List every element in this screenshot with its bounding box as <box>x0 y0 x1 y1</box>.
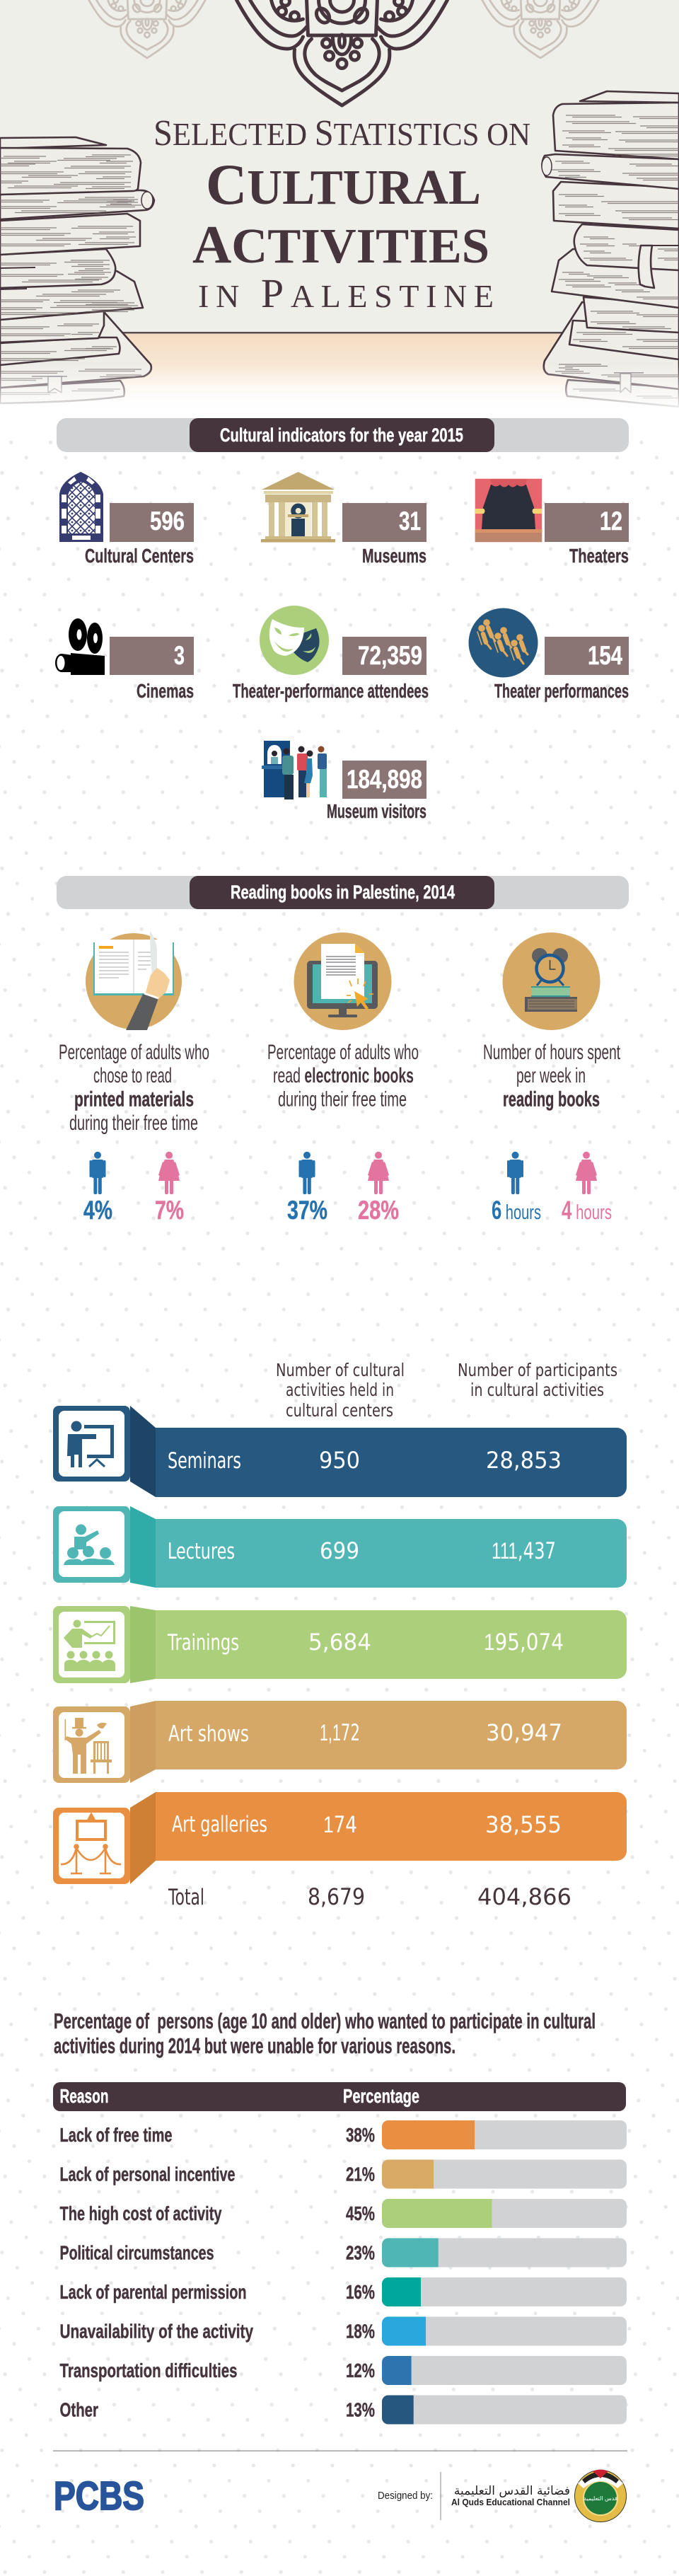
text: description: Percentage of adults who <box>59 1041 209 1064</box>
section heading: cultural indicators <box>57 418 629 452</box>
indicator: theater-performance attendees <box>233 606 429 702</box>
panel: indicators <box>55 472 629 822</box>
row: art shows: Art shows <box>168 1721 249 1747</box>
row: seminars: 28,853 <box>486 1447 562 1474</box>
row: seminars: Seminars <box>168 1448 241 1474</box>
indicator: theater performances <box>468 608 629 702</box>
male value: 6 hours <box>492 1196 541 1225</box>
panel: reading electronic books <box>267 932 419 1225</box>
row: lack of personal incentive <box>59 2159 627 2189</box>
section heading: reading books: Reading books in Palestine, 2014 <box>231 882 455 903</box>
row: unavailability: 18% <box>346 2321 375 2342</box>
credit: designed by: فضائية القدس التعليمية <box>454 2484 570 2498</box>
icon: framed art and ropes <box>61 1814 121 1873</box>
text: description: per week in <box>516 1064 586 1087</box>
indicator: theaters <box>475 479 629 567</box>
section heading: reading books <box>57 876 629 909</box>
panel: reading hours <box>483 932 620 1225</box>
indicator: theater performances: 154 <box>588 641 622 670</box>
credit: designed by: Designed by: <box>378 2490 433 2502</box>
section heading: cultural indicators: Cultural indicators for the year 2015 <box>220 424 463 446</box>
indicator: theater-performance attendees: Theater-performance attendees <box>233 680 429 702</box>
row: total: Total <box>168 1885 204 1910</box>
bar chart: reasons <box>59 2120 627 2424</box>
heading: reasons for non-participation <box>54 2009 596 2058</box>
male value: 4% <box>83 1196 112 1225</box>
text: description <box>483 1041 620 1111</box>
row: art galleries: 174 <box>323 1811 357 1838</box>
icon: presenter at board <box>67 1421 114 1467</box>
icon: lattice window <box>59 472 103 542</box>
icon: monitor with document <box>294 932 392 1030</box>
row: lectures: 699 <box>320 1537 359 1564</box>
row: lectures: Lectures <box>168 1539 235 1564</box>
row: other <box>59 2396 627 2424</box>
table header <box>53 2082 626 2111</box>
male value: 37% <box>287 1196 327 1225</box>
icon: alarm clock on books <box>502 932 600 1030</box>
female figure <box>576 1152 597 1194</box>
row: high cost: 45% <box>346 2202 375 2224</box>
row: seminars <box>53 1406 627 1497</box>
row: transportation: Transportation difficulties <box>59 2360 238 2381</box>
title line 2: CULTURAL <box>206 152 481 216</box>
row: transportation: 12% <box>346 2360 375 2381</box>
illustration: right stack of books <box>542 91 679 407</box>
indicator: cinemas <box>55 618 194 702</box>
table header: Reason <box>59 2085 109 2107</box>
ornament: center <box>236 0 447 105</box>
indicator: theater-performance attendees: 72,359 <box>358 641 422 670</box>
female figure <box>368 1152 389 1194</box>
panel: reading printed materials <box>59 931 209 1225</box>
indicator: theaters: 12 <box>600 507 622 536</box>
ornament: left side <box>88 0 206 58</box>
title line 4: IN PALESTINE <box>198 270 494 316</box>
icon: museum building <box>261 472 335 542</box>
indicator: museum visitors <box>262 741 426 822</box>
indicator: cinemas: 3 <box>174 641 185 670</box>
indicator: museums: Museums <box>362 545 426 567</box>
column heading: number of activities: activities held in <box>286 1380 394 1400</box>
paper background <box>0 0 679 333</box>
row: seminars: 950 <box>319 1447 360 1474</box>
text: description: chose to read <box>93 1064 172 1087</box>
row: total: 8,679 <box>308 1883 365 1910</box>
column heading: number of participants <box>458 1360 617 1400</box>
row: unavailability <box>59 2316 627 2346</box>
heading: reasons for non-participation: activities during 2014 but were unable for various reasons. <box>54 2033 455 2058</box>
indicator: museum visitors: Museum visitors <box>327 800 426 822</box>
table surface <box>0 333 679 411</box>
emblem: Al Quds Open University: قدس التعليمية <box>584 2495 617 2502</box>
row: political circumstances: 23% <box>346 2241 375 2264</box>
row: art galleries <box>53 1792 627 1884</box>
text: description <box>267 1041 419 1111</box>
ornament: right side <box>482 0 599 58</box>
icon: audience in seats <box>468 608 538 678</box>
column heading: number of participants: in cultural activities <box>470 1380 604 1400</box>
credit: designed by <box>378 2472 570 2520</box>
male figure <box>298 1152 315 1194</box>
icon: lecturer and audience <box>64 1524 115 1565</box>
fade of books into page <box>0 364 679 412</box>
row: political circumstances <box>59 2239 627 2267</box>
column heading: number of activities: cultural centers <box>286 1400 393 1421</box>
row: lectures <box>53 1506 627 1588</box>
row: total: 404,866 <box>477 1883 571 1910</box>
title line 3: ACTIVITIES <box>192 215 489 275</box>
row: lack of free time <box>59 2120 627 2149</box>
text: description: Percentage of adults who <box>267 1041 419 1064</box>
row: trainings <box>53 1606 627 1683</box>
text: description: read electronic books <box>273 1064 414 1087</box>
indicator: cultural centers: Cultural Centers <box>85 545 194 567</box>
credit: designed by: Al Quds Educational Channel <box>451 2497 570 2507</box>
indicator: museums: 31 <box>399 507 421 536</box>
row: art galleries: 38,555 <box>485 1811 562 1838</box>
row: transportation <box>59 2356 627 2385</box>
icon: visitors at ticket booth <box>262 741 327 799</box>
female figure <box>158 1152 180 1194</box>
indicator: cinemas: Cinemas <box>137 680 194 702</box>
title <box>153 113 530 316</box>
header banner <box>0 0 679 412</box>
illustration: left stack of books <box>0 137 154 403</box>
icon: open book and hand <box>86 931 182 1030</box>
text: description: reading books <box>503 1088 600 1111</box>
row: art shows: 30,947 <box>486 1719 562 1746</box>
female value: 7% <box>155 1196 184 1225</box>
female value: 28% <box>358 1196 399 1225</box>
male figure <box>507 1152 523 1194</box>
icon: film camera <box>55 618 105 675</box>
indicator: cultural centers: 596 <box>150 507 185 536</box>
row: lack of free time: Lack of free time <box>59 2124 173 2146</box>
text: description: printed materials <box>74 1088 194 1111</box>
row: high cost: The high cost of activity <box>59 2202 222 2224</box>
indicator: cultural centers <box>59 472 194 567</box>
icon: auctioneer and chair <box>65 1718 112 1774</box>
female value: 4 hours <box>562 1196 612 1225</box>
icon: drama masks <box>260 606 329 675</box>
text: description <box>59 1041 209 1135</box>
logo: PCBS: PCBS <box>54 2473 144 2519</box>
row: lectures: 111,437 <box>492 1537 556 1564</box>
icon: theater stage <box>475 479 542 542</box>
row: trainings: Trainings <box>167 1630 239 1656</box>
row: parental permission <box>59 2277 627 2306</box>
text: description: during their free time <box>278 1088 407 1111</box>
row: lack of personal incentive: 21% <box>346 2164 375 2185</box>
title line 1: SELECTED STATISTICS ON <box>153 113 530 154</box>
icon: trainer and group <box>64 1620 115 1671</box>
row: unavailability: Unavailability of the activity <box>59 2321 253 2342</box>
row: trainings: 195,074 <box>484 1629 564 1656</box>
row: other: Other <box>59 2398 98 2421</box>
row: art shows: 1,172 <box>320 1719 360 1746</box>
row: lack of personal incentive: Lack of personal incentive <box>59 2164 235 2185</box>
row: trainings: 5,684 <box>308 1629 371 1656</box>
row: art shows <box>53 1701 627 1783</box>
row: parental permission: 16% <box>346 2281 375 2303</box>
row: other: 13% <box>346 2398 375 2421</box>
male figure <box>89 1152 106 1194</box>
row: total <box>168 1883 571 1910</box>
emblem: Al Quds Open University <box>574 2469 627 2522</box>
indicator: theaters: Theaters <box>569 545 629 567</box>
indicator: museums <box>261 472 426 567</box>
row: art galleries: Art galleries <box>172 1812 267 1837</box>
table edge <box>0 332 679 334</box>
row: high cost <box>59 2199 627 2228</box>
table header: Percentage <box>343 2085 419 2107</box>
column heading: number of activities: Number of cultural <box>276 1360 405 1380</box>
text: description: during their free time <box>69 1111 198 1135</box>
column heading: number of participants: Number of participants <box>458 1360 617 1380</box>
row: political circumstances: Political circumstances <box>59 2241 214 2264</box>
row: parental permission: Lack of parental permission <box>59 2281 246 2303</box>
indicator: museum visitors: 184,898 <box>347 765 422 794</box>
column heading: number of activities <box>276 1360 405 1421</box>
row: lack of free time: 38% <box>346 2124 375 2146</box>
